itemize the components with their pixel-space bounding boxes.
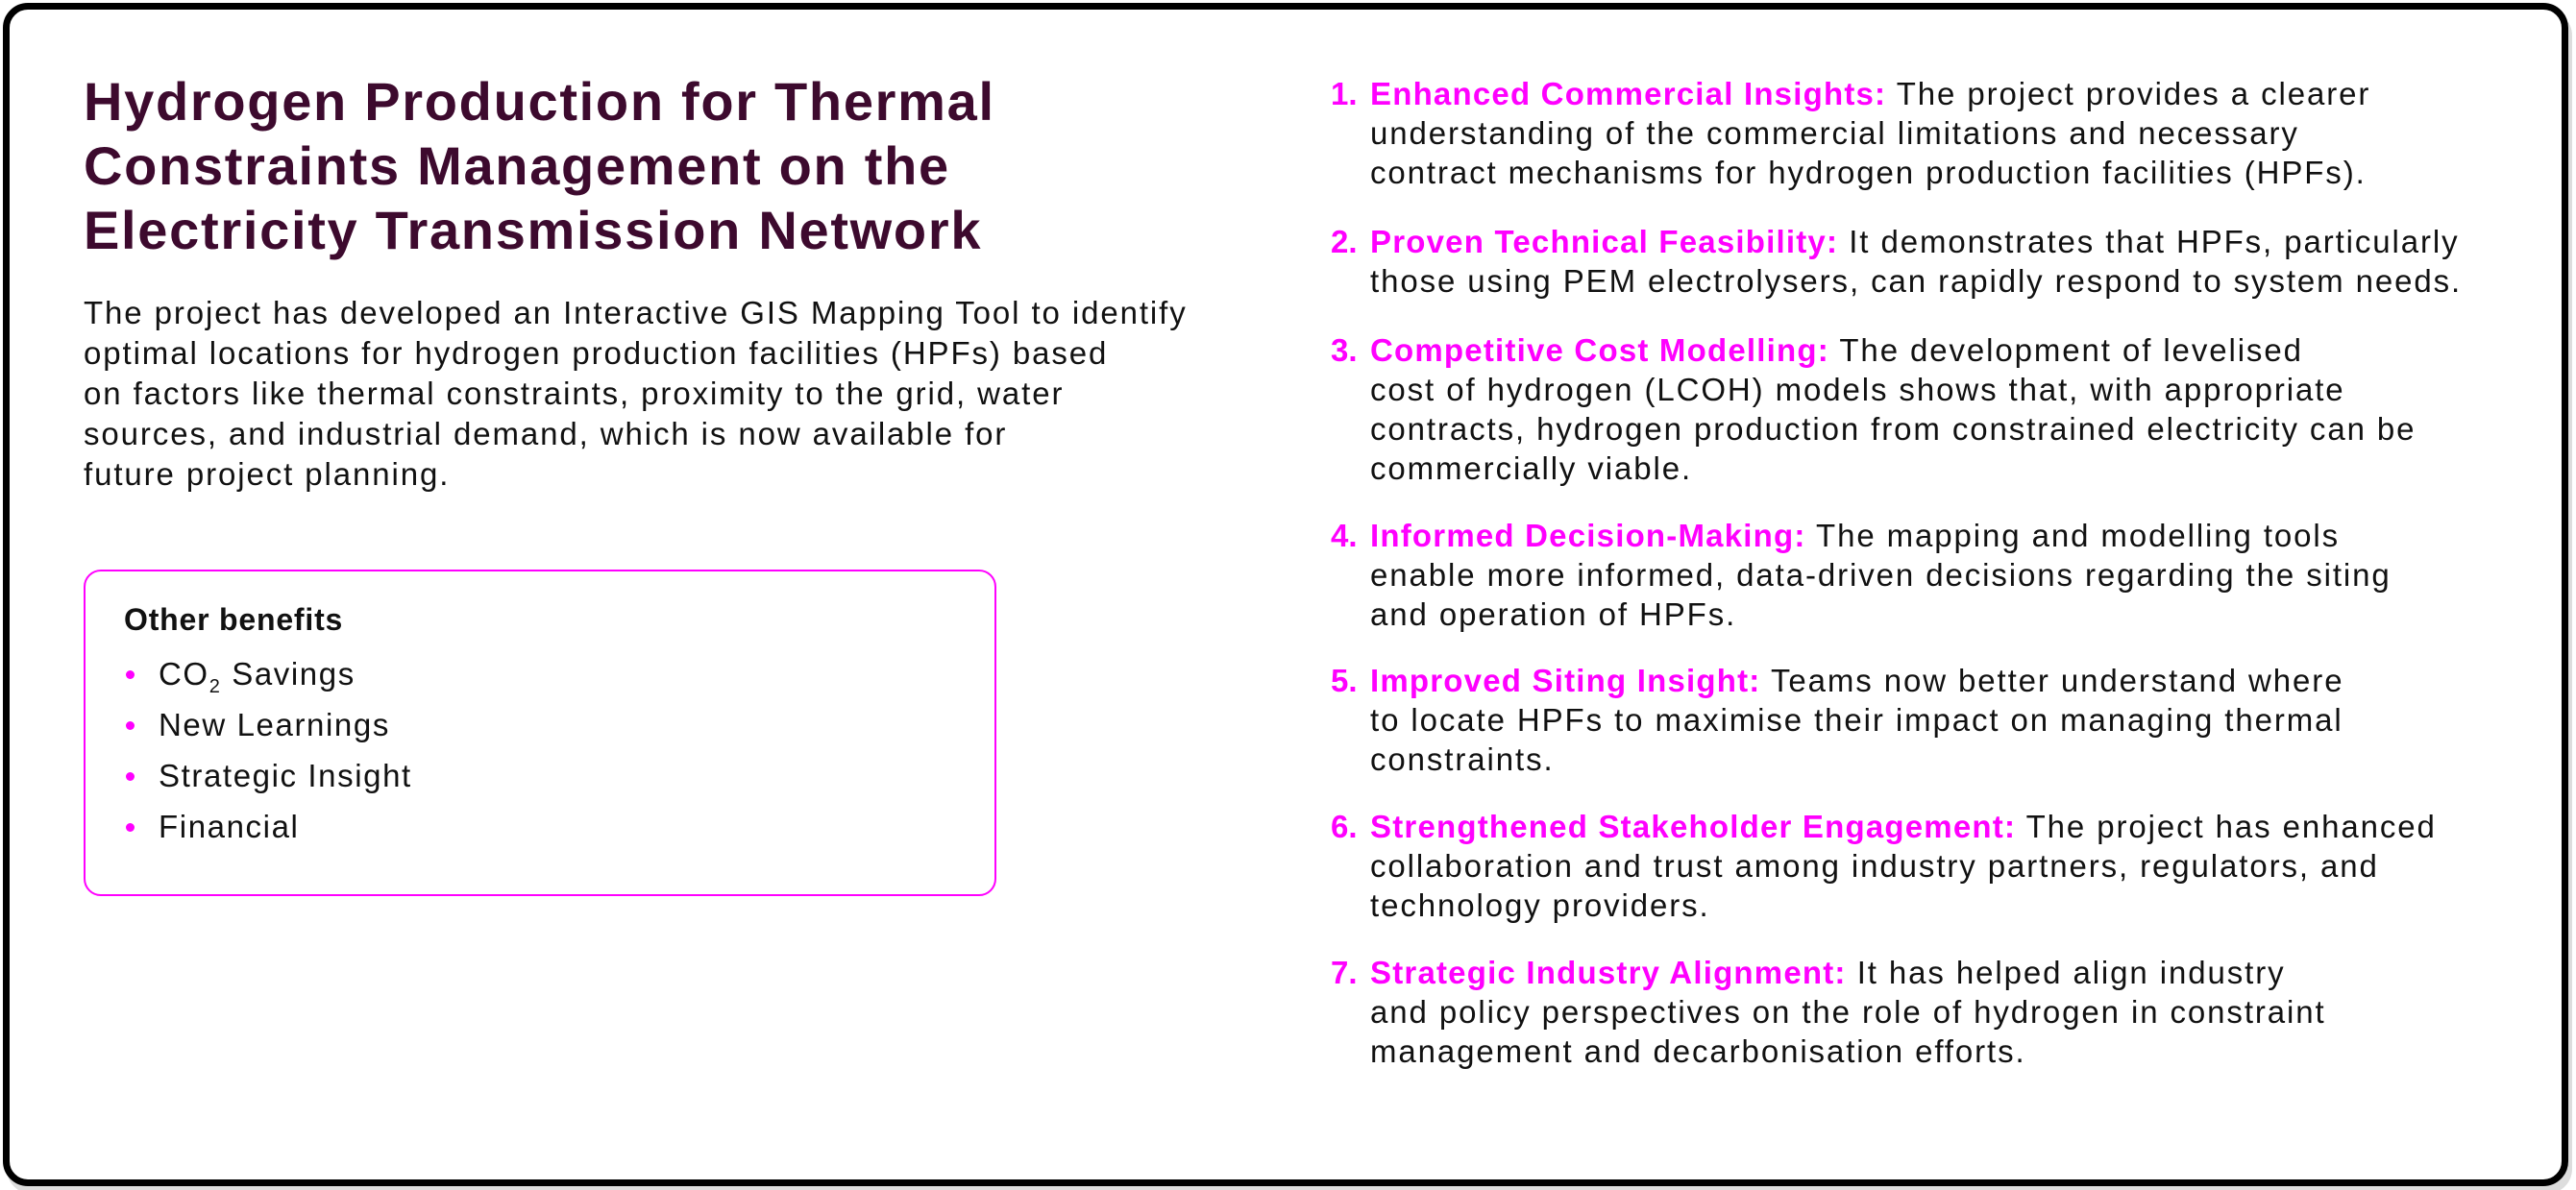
intro text: The project has developed an Interactive GIS Mapping Tool to identify	[84, 295, 1188, 330]
benefits list: New Learnings	[159, 707, 390, 742]
item 3: Competitive Cost Modelling: The development of levelised	[1370, 332, 2303, 368]
intro text: future project planning.	[84, 456, 450, 492]
item 2: Proven Technical Feasibility: It demonstrates that HPFs, particularly	[1370, 224, 2460, 259]
intro text: on factors like thermal constraints, proximity to the grid, water	[84, 376, 1064, 411]
item 5	[1331, 663, 2343, 777]
title: Constraints Management on the	[84, 135, 950, 196]
intro text: sources, and industrial demand, which is now available for	[84, 416, 1007, 451]
item 7: 7.	[1331, 955, 1358, 990]
benefits list	[126, 656, 412, 844]
title	[84, 71, 995, 260]
item 1: understanding of the commercial limitations and necessary	[1370, 115, 2299, 151]
item 3: commercially viable.	[1370, 450, 1692, 486]
intro text	[84, 295, 1188, 492]
item 3: cost of hydrogen (LCOH) models shows that, with appropriate	[1370, 372, 2345, 407]
title: Hydrogen Production for Thermal	[84, 71, 995, 132]
benefits list: CO2 Savings	[159, 656, 356, 697]
benefits list: Financial	[159, 809, 299, 844]
item 7: and policy perspectives on the role of hydrogen in constraint	[1370, 994, 2326, 1030]
item 6: Strengthened Stakeholder Engagement: The project has enhanced	[1370, 809, 2437, 844]
item 5: constraints.	[1370, 741, 1555, 777]
item 6: 6.	[1331, 809, 1358, 844]
title: Electricity Transmission Network	[84, 200, 982, 260]
item 5: Improved Siting Insight: Teams now better understand where	[1370, 663, 2343, 698]
item 6: technology providers.	[1370, 887, 1710, 923]
benefits list: Strategic Insight	[159, 758, 412, 793]
item 3	[1331, 332, 2416, 486]
item 2: 2.	[1331, 224, 1358, 259]
item 5: 5.	[1331, 663, 1358, 698]
item 3: contracts, hydrogen production from constrained electricity can be	[1370, 411, 2416, 447]
item 4: enable more informed, data-driven decisions regarding the siting	[1370, 557, 2392, 593]
intro text: optimal locations for hydrogen production facilities (HPFs) based	[84, 335, 1108, 371]
item 4: Informed Decision-Making: The mapping and modelling tools	[1370, 518, 2340, 553]
item 7	[1331, 955, 2326, 1069]
item 4: and operation of HPFs.	[1370, 596, 1736, 632]
item 6	[1331, 809, 2437, 923]
item 2	[1331, 224, 2462, 299]
item 4: 4.	[1331, 518, 1358, 553]
item 3: 3.	[1331, 332, 1358, 368]
item 4	[1331, 518, 2392, 632]
panel: other benefits	[84, 570, 996, 896]
item 1: contract mechanisms for hydrogen production facilities (HPFs).	[1370, 155, 2367, 190]
item 7: Strategic Industry Alignment: It has helped align industry	[1370, 955, 2285, 990]
item 6: collaboration and trust among industry partners, regulators, and	[1370, 848, 2379, 884]
item 7: management and decarbonisation efforts.	[1370, 1033, 2026, 1069]
item 5: to locate HPFs to maximise their impact on managing thermal	[1370, 702, 2343, 738]
heading: other benefits: Other benefits	[124, 602, 343, 637]
item 1: 1.	[1331, 76, 1358, 111]
item 1	[1331, 76, 2370, 190]
item 2: those using PEM electrolysers, can rapidly respond to system needs.	[1370, 263, 2462, 299]
item 1: Enhanced Commercial Insights: The project provides a clearer	[1370, 76, 2370, 111]
